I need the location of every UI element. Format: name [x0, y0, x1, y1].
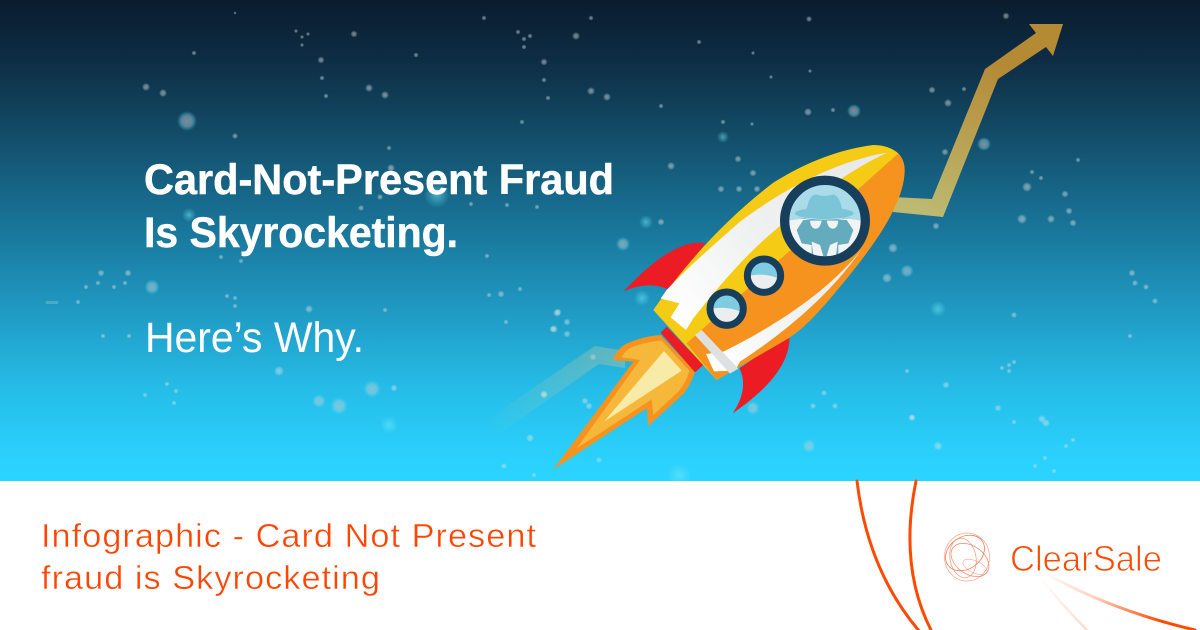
star field: [46, 12, 1158, 487]
porthole: upper small: [747, 259, 781, 292]
porthole: lower small: [710, 292, 743, 325]
ClearSale wordmark: ClearSale: [1010, 538, 1162, 579]
rocket illustration: [553, 145, 905, 469]
ClearSale logo icon: [939, 528, 995, 584]
rocket bottom fin: [733, 334, 789, 413]
footer band: [0, 481, 1200, 630]
rocket flame: [553, 335, 695, 469]
porthole: detective: [785, 180, 865, 261]
growth arrow: [893, 24, 1063, 217]
sky background: [0, 0, 1200, 481]
footer caption: fraud is Skyrocketing: [41, 559, 381, 596]
rocket body: [653, 145, 905, 380]
subheading: Here’s Why.: [145, 314, 364, 362]
rocket nozzle: [661, 327, 703, 372]
rocket trail: [489, 346, 625, 441]
rocket top fin: [623, 243, 706, 292]
heading: Is Skyrocketing.: [144, 209, 458, 257]
heading: Card-Not-Present Fraud: [144, 156, 614, 204]
footer caption: Infographic - Card Not Present: [41, 517, 537, 554]
decorative orange arcs: [857, 481, 1195, 630]
